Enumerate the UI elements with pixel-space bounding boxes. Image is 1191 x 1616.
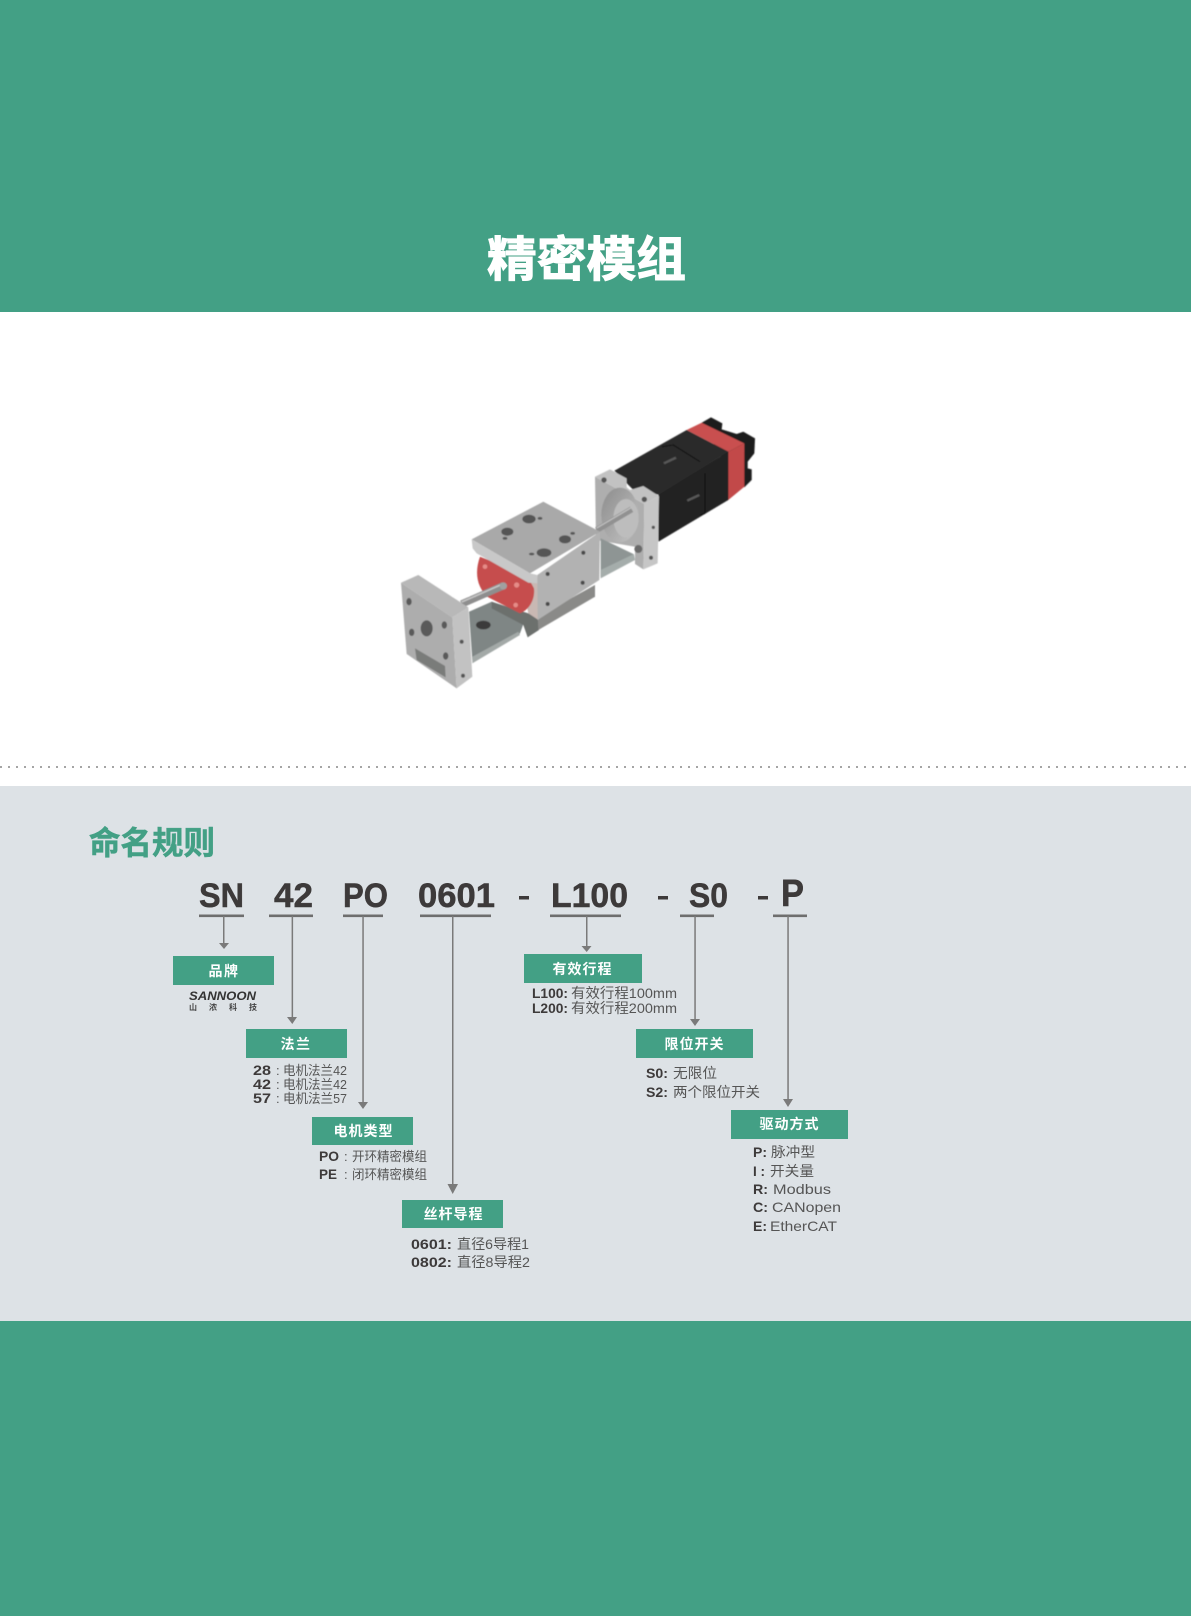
rear flange: [595, 469, 659, 578]
block: flange: 42: [253, 1076, 271, 1092]
block: flange: :: [276, 1091, 280, 1106]
model code: PO: [343, 877, 388, 915]
model code: 42: [274, 877, 313, 915]
block: flange: 57: [253, 1090, 271, 1106]
model code: S0: [689, 877, 728, 915]
block: flange: 28: [253, 1062, 271, 1078]
block: drive mode: EtherCAT: [770, 1218, 837, 1234]
block: motor type: 闭环精密模组: [352, 1167, 427, 1182]
block: motor type: :: [344, 1167, 348, 1182]
block: drive mode: 开关量: [770, 1163, 814, 1179]
block: flange: 电机法兰42: [283, 1077, 347, 1092]
block: drive mode: R:: [753, 1181, 768, 1197]
block: drive mode: 脉冲型: [771, 1144, 815, 1160]
product image: precision module: [401, 417, 755, 688]
model code: [199, 873, 804, 915]
block: effective stroke: 有效行程100mm: [571, 985, 677, 1001]
block: motor type: PO: [319, 1148, 339, 1164]
block: motor type: :: [344, 1149, 348, 1164]
block: motor type: 电机类型: [334, 1123, 394, 1139]
block: drive mode: P:: [753, 1144, 767, 1160]
lead screw: [462, 582, 507, 604]
model code: 0601: [418, 877, 495, 915]
logo: SANNOON: [189, 989, 257, 1012]
block: flange: 电机法兰42: [283, 1063, 347, 1078]
block: limit switch: [636, 1029, 760, 1100]
block: screw lead: 0802:: [411, 1254, 452, 1270]
block: effective stroke: 有效行程200mm: [571, 1000, 677, 1016]
block: limit switch: 限位开关: [664, 1036, 724, 1052]
block: brand: 品牌: [208, 963, 240, 979]
carriage block: [472, 502, 600, 620]
block: flange: :: [276, 1077, 280, 1092]
arrow: brand: [219, 916, 229, 949]
title: 精密模组: [487, 234, 686, 287]
block: drive mode: CANopen: [772, 1199, 841, 1215]
block: screw lead: 直径8导程2: [457, 1254, 530, 1270]
block: limit switch: 无限位: [673, 1065, 717, 1081]
arrow: limit switch: [690, 916, 700, 1026]
block: motor type: [312, 1117, 427, 1182]
linear rail: [469, 585, 595, 663]
arrow: stroke: [582, 916, 592, 952]
front end plate: [401, 575, 472, 688]
block: brand: [173, 956, 274, 1012]
block: drive mode: I :: [753, 1163, 765, 1179]
block: motor type: 开环精密模组: [352, 1149, 427, 1164]
block: drive mode: C:: [753, 1199, 768, 1215]
heading: naming rules: 命名规则: [89, 825, 215, 861]
block: effective stroke: L200:: [532, 1000, 568, 1016]
block: limit switch: 两个限位开关: [673, 1084, 760, 1100]
block: flange: [246, 1029, 347, 1106]
block: drive mode: Modbus: [773, 1181, 831, 1197]
block: limit switch: S2:: [646, 1084, 668, 1100]
panel: naming rules: [0, 786, 1191, 1321]
bottom banner: [0, 1321, 1191, 1616]
block: drive mode: E:: [753, 1218, 767, 1234]
logo: SANNOON: 山: [189, 1002, 197, 1012]
block: motor type: PE: [319, 1166, 337, 1182]
block: effective stroke: [524, 954, 677, 1016]
red nut flange: [477, 557, 538, 620]
block: effective stroke: L100:: [532, 985, 568, 1001]
motor: [614, 417, 755, 542]
block: screw lead: 0601:: [411, 1236, 452, 1252]
block: flange: 电机法兰57: [283, 1091, 347, 1106]
block: drive mode: 驱动方式: [760, 1116, 820, 1132]
block: screw lead: 直径6导程1: [457, 1236, 529, 1252]
top banner: [0, 0, 1191, 312]
arrow: flange: [287, 916, 297, 1024]
block: flange: 法兰: [280, 1036, 312, 1052]
arrow: screw lead: [448, 916, 458, 1194]
block: screw lead: 丝杆导程: [424, 1206, 484, 1222]
model code: SN: [199, 877, 244, 915]
block: limit switch: S0:: [646, 1065, 668, 1081]
block: drive mode: [731, 1110, 848, 1234]
block: effective stroke: 有效行程: [552, 961, 612, 977]
logo: SANNOON: 技: [249, 1002, 257, 1012]
logo: SANNOON: 科: [229, 1002, 237, 1012]
model code: L100: [551, 877, 628, 915]
block: flange: :: [276, 1063, 280, 1078]
block: screw lead: [402, 1200, 530, 1270]
model code: P: [781, 873, 804, 915]
logo: SANNOON: 浓: [209, 1002, 217, 1012]
arrow: drive mode: [783, 916, 793, 1107]
arrow: motor type: [358, 916, 368, 1109]
logo: SANNOON: SANNOON: [189, 989, 256, 1003]
